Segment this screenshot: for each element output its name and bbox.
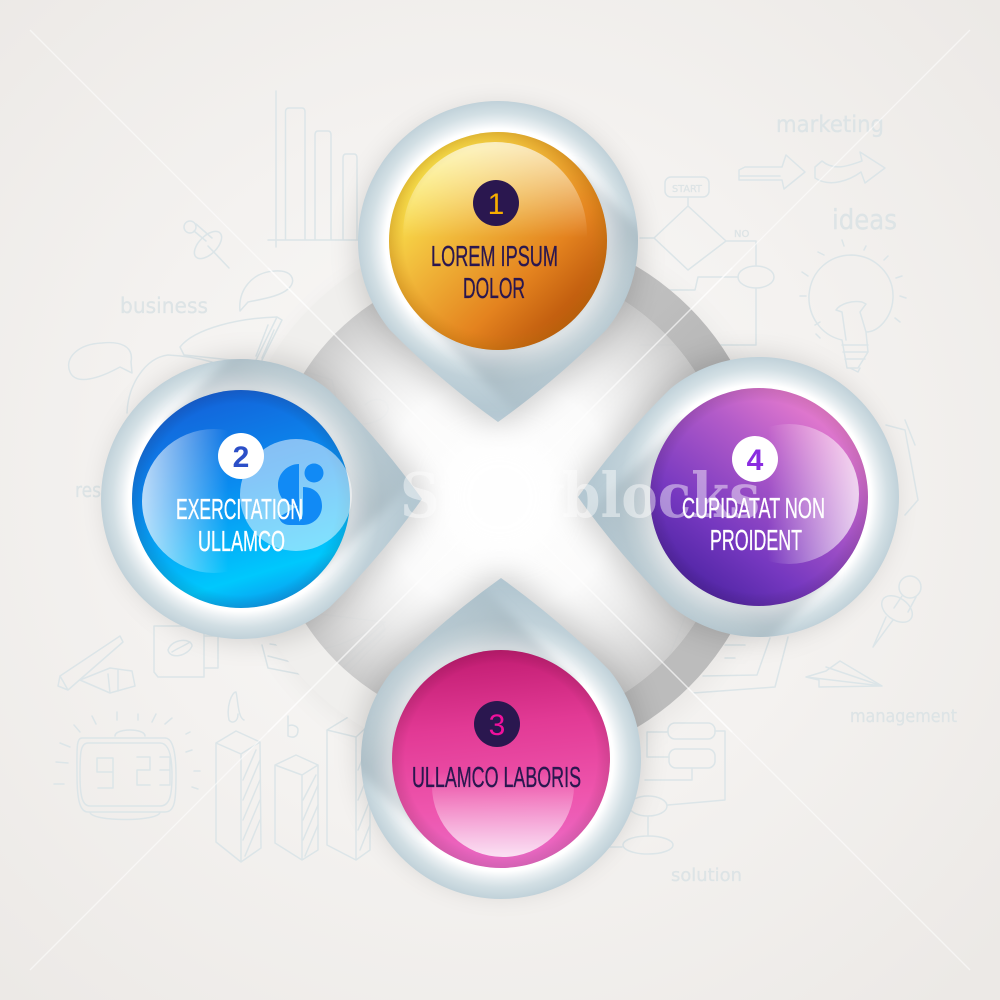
doodle: flowchart start bbox=[640, 177, 774, 345]
pin 1 gloss bbox=[403, 142, 587, 326]
pin 4 ball bbox=[650, 388, 868, 606]
doodle: push pin right bbox=[873, 576, 921, 647]
doodle: person sketch right bbox=[886, 420, 918, 515]
pin 2 ball bbox=[132, 390, 350, 608]
pin 2 body bbox=[101, 359, 422, 639]
doodle: alarm clock bbox=[54, 712, 200, 820]
center disc bbox=[267, 264, 733, 730]
doodle: pie sketch bbox=[127, 317, 388, 424]
pin 3 body bbox=[361, 578, 641, 899]
watermark badge dot bbox=[304, 464, 324, 482]
central white glow bbox=[438, 435, 562, 559]
pin 3 drop shadow bbox=[361, 568, 641, 889]
doodle: speech bubble upper bbox=[240, 271, 293, 311]
pin 2 label: ULLAMCO bbox=[198, 526, 285, 558]
watermark badge mark bbox=[278, 464, 322, 525]
doodle: bar chart top left bbox=[268, 91, 360, 247]
pin 1 label: LOREM IPSUM bbox=[431, 241, 558, 273]
background doodles bbox=[54, 91, 957, 886]
doodle: speech bubble left bbox=[69, 343, 132, 379]
doodle: light bulb bbox=[800, 240, 906, 372]
text: business: business bbox=[120, 294, 208, 318]
pin 1 label: DOLOR bbox=[463, 273, 525, 305]
pin 4 label: CUPIDATAT NON bbox=[682, 493, 825, 525]
text: res: res bbox=[75, 478, 101, 502]
pin 2 long shadow bbox=[162, 359, 402, 578]
doodle: push pin left bbox=[184, 221, 229, 268]
doodle: book bbox=[262, 614, 385, 680]
pin 4 long shadow bbox=[598, 418, 838, 637]
pin 2 number badge: 2 bbox=[233, 441, 249, 474]
doodle: 3d bars a b c bbox=[216, 692, 370, 862]
ring base shadow bbox=[237, 237, 773, 773]
pin 1 number badge: 1 bbox=[488, 188, 504, 221]
pin 2 ball shading bbox=[132, 390, 350, 608]
doodle: paper plane bbox=[806, 661, 882, 687]
pin 4 body bbox=[578, 357, 899, 637]
text: marketing: marketing bbox=[776, 112, 884, 138]
doodle: coffee mug bbox=[154, 626, 218, 677]
doodle: straight arrow bbox=[739, 155, 805, 189]
pin 2: blue bbox=[100, 348, 433, 650]
pin 3 gloss bbox=[432, 715, 574, 857]
pin 1 ball shading bbox=[389, 132, 607, 350]
pin 2 gloss bbox=[142, 429, 286, 573]
text: management: management bbox=[850, 706, 957, 727]
pin 3 long shadow bbox=[361, 598, 580, 838]
pin 2 number badge bbox=[218, 433, 264, 479]
doodle: flowchart bottom right bbox=[610, 617, 788, 854]
doodle: pencil and eraser bbox=[58, 636, 135, 693]
ring: light left and base bbox=[232, 229, 768, 765]
pin 1 ball bbox=[389, 132, 607, 350]
text: NO: NO bbox=[734, 229, 749, 240]
pin 3: pink bbox=[350, 566, 652, 900]
pin 1 body bbox=[358, 101, 638, 422]
ring: grey arcs right side bbox=[624, 266, 730, 727]
text: ideas: ideas bbox=[832, 203, 897, 236]
pin 4 gloss bbox=[719, 424, 859, 564]
pin 2 label: EXERCITATION bbox=[176, 494, 303, 526]
pin 3 number badge: 3 bbox=[489, 709, 505, 742]
pin 4 number badge bbox=[732, 436, 778, 482]
watermark badge bbox=[240, 439, 352, 551]
pin 2 drop shadow bbox=[111, 359, 432, 639]
pin 4 number badge: 4 bbox=[747, 444, 764, 477]
text: solution: solution bbox=[671, 865, 742, 886]
pin 4 label: PROIDENT bbox=[710, 525, 802, 557]
watermark text: Storyblocks bbox=[400, 459, 760, 532]
ring: connecting arcs bbox=[276, 266, 730, 727]
pin 3 ball bbox=[392, 650, 610, 868]
pin 4: purple bbox=[566, 346, 900, 648]
pin 1 drop shadow bbox=[358, 111, 638, 432]
pin 4 drop shadow bbox=[568, 357, 889, 637]
doodle: wavy arrow bbox=[815, 152, 885, 183]
pin 3 ball shading bbox=[392, 650, 610, 868]
text: START: START bbox=[672, 184, 703, 195]
pin 4 ball shading bbox=[650, 388, 868, 606]
pin 1 long shadow bbox=[420, 162, 638, 402]
pin 3 number badge bbox=[474, 701, 520, 747]
pin 3 label: ULLAMCO LABORIS bbox=[412, 762, 581, 794]
pin 1 number badge bbox=[473, 180, 519, 226]
watermark bbox=[240, 439, 760, 551]
diagonal highlight over ring bbox=[268, 268, 732, 732]
pin 1: orange bbox=[346, 100, 650, 432]
